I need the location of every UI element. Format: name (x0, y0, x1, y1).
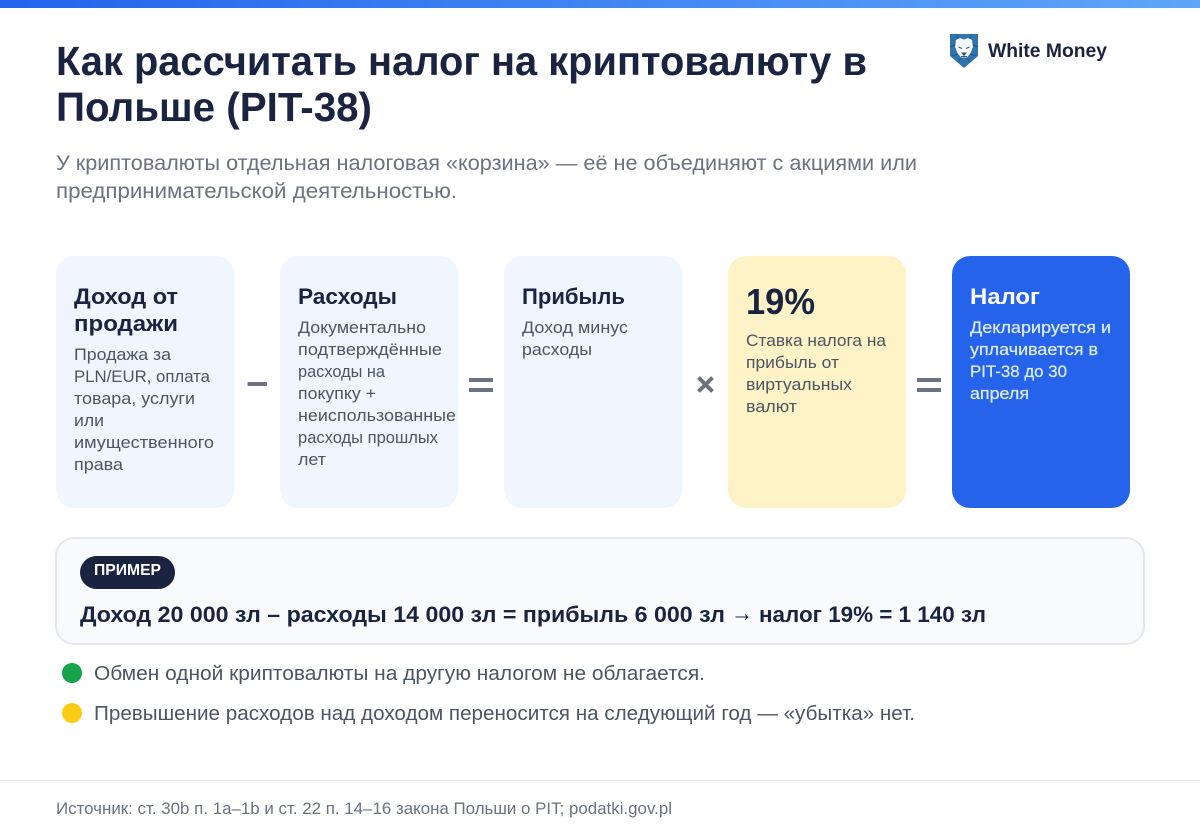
panel: ставка 19%: прибыль от (746, 354, 839, 372)
panel: налог: Декларируется и (970, 319, 1111, 337)
panel: пример (56, 538, 1144, 644)
panel: ставка 19%: виртуальных (746, 376, 853, 394)
title (56, 38, 867, 130)
logo wordmark: White Money (988, 40, 1107, 62)
panel: ставка 19%: 19% (746, 281, 815, 322)
panel: доход от продажи: или (74, 412, 104, 430)
title: Как рассчитать налог на криптовалюту в (56, 38, 867, 84)
icon: lion shield (950, 34, 978, 68)
panel: налог (952, 256, 1130, 508)
panel: расходы: лет (298, 451, 326, 469)
subtitle (56, 151, 917, 203)
panel: расходы: расходы прошлых (298, 429, 439, 447)
example formula (80, 600, 986, 627)
panel: налог: апреля (970, 385, 1029, 403)
example formula: Доход 20 000 зл – расходы 14 000 зл = прибыль 6 000 зл (80, 602, 725, 627)
panel: прибыль: расходы (522, 341, 592, 359)
panel: расходы (280, 256, 458, 508)
panel: налог: Налог (970, 284, 1040, 309)
badge: пример (80, 556, 175, 589)
note: обмен: Обмен одной криптовалюты на другую налогом не облагается. (94, 663, 705, 685)
panel: доход от продажи: права (74, 456, 124, 474)
panel: прибыль: Прибыль (522, 284, 625, 309)
subtitle: предпринимательской деятельностью. (56, 179, 457, 203)
title: Польше (PIT-38) (56, 84, 372, 130)
panel: доход от продажи: Продажа за (74, 346, 172, 364)
panel: доход от продажи (56, 256, 234, 508)
panel: расходы: подтверждённые (298, 341, 442, 359)
panel: прибыль: Доход минус (522, 319, 628, 337)
top accent bar (0, 0, 1200, 8)
source: Источник: ст. 30b п. 1a–1b и ст. 22 п. 14–16 закона Польши о PIT; podatki.gov.pl (56, 800, 672, 818)
panel: расходы: покупку + (298, 385, 376, 403)
panel: налог: PIT-38 до 30 (970, 363, 1067, 381)
panel: доход от продажи: товара, услуги (74, 390, 195, 408)
logo: White Money (950, 34, 1107, 68)
footer divider (0, 780, 1200, 781)
subtitle: У криптовалюты отдельная налоговая «корзина» — её не объединяют с акциями или (56, 151, 917, 175)
panel: расходы: расходы на (298, 363, 386, 381)
example formula: → (731, 600, 753, 627)
panel: доход от продажи: PLN/EUR, оплата (74, 368, 211, 386)
note: превышение: Превышение расходов над доходом переносится на следующий год — «убытка» нет. (94, 703, 915, 725)
example formula: налог 19% = 1 140 зл (759, 602, 986, 627)
operator: multiply (698, 378, 712, 392)
panel: прибыль (504, 256, 682, 508)
operator: equals (917, 378, 941, 392)
panel: ставка 19% (728, 256, 906, 508)
panel: расходы: Документально (298, 319, 426, 337)
badge: пример: ПРИМЕР (94, 562, 161, 579)
operator: equals (469, 378, 493, 392)
panel: доход от продажи: продажи (74, 311, 178, 336)
panel: доход от продажи: Доход от (74, 284, 178, 309)
panel: расходы: Расходы (298, 284, 397, 309)
panel: расходы: неиспользованные (298, 407, 456, 425)
panel: доход от продажи: имущественного (74, 434, 214, 452)
panel: налог: уплачивается в (970, 341, 1098, 359)
panel: ставка 19%: Ставка налога на (746, 332, 887, 350)
operator: minus (248, 382, 267, 386)
panel: ставка 19%: валют (746, 398, 797, 416)
